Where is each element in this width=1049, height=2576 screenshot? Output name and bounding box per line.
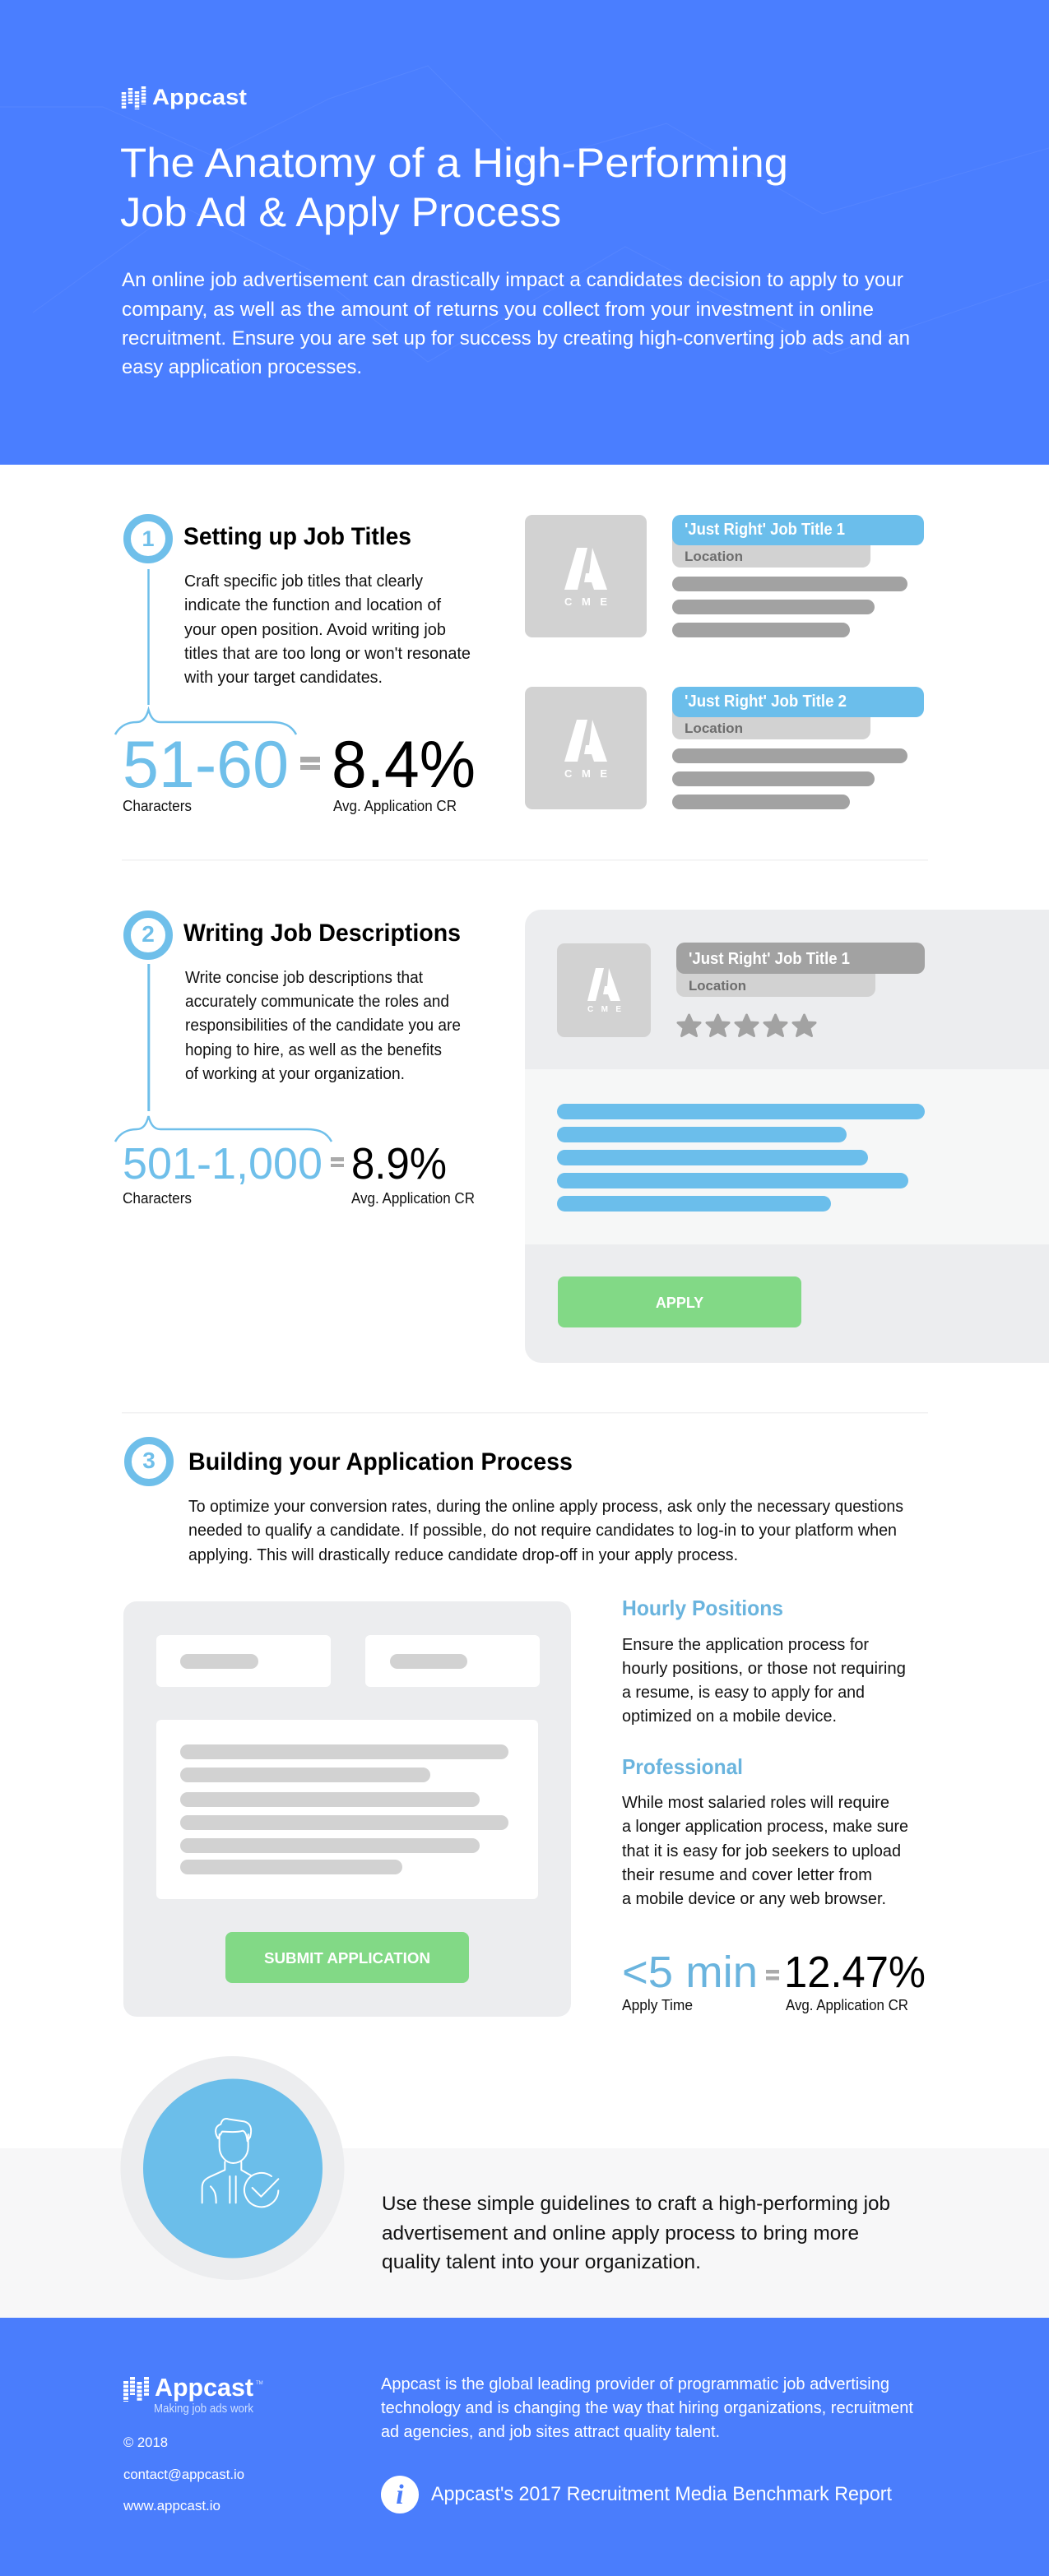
section 1 body text: with your target candidates.	[183, 668, 383, 687]
intro text: easy application processes.	[122, 356, 362, 378]
footer about text: technology and is changing the way that hiring organizations, recruitment	[381, 2399, 913, 2417]
section 2 body text: Write concise job descriptions that	[185, 968, 423, 987]
professional text: that it is easy for job seekers to upload	[622, 1842, 901, 1860]
footer logo: TM	[256, 2381, 263, 2386]
header banner	[0, 0, 1049, 465]
job card 1: C M E	[564, 595, 607, 608]
step 2 badge: 2	[142, 921, 155, 947]
stat: 501-1,000 characters = 8.9%: 501-1,000	[123, 1139, 323, 1188]
section 2 body text: accurately communicate the roles and	[185, 992, 449, 1011]
section 1: setting up job titles	[115, 515, 924, 814]
footer contact: www.appcast.io	[123, 2498, 220, 2513]
stat: 51-60 characters = 8.4%: 8.4%	[332, 728, 476, 802]
footer contact: contact@appcast.io	[123, 2467, 244, 2482]
footer about text: ad agencies, and job sites attract quality talent.	[381, 2423, 720, 2441]
stat: under 5 min apply time = 12.47%: Avg. Application CR	[786, 1997, 908, 2013]
icon: info: i	[396, 2480, 404, 2510]
hourly positions text: hourly positions, or those not requiring	[622, 1659, 906, 1678]
hourly positions text: Ensure the application process for	[622, 1635, 869, 1654]
closing text	[382, 2193, 890, 2273]
footer	[0, 2318, 1049, 2576]
stat: 501-1,000 characters = 8.9%	[123, 1139, 475, 1207]
closing text: Use these simple guidelines to craft a high-performing job	[382, 2193, 890, 2215]
stat: under 5 min apply time = 12.47%: <5 min	[622, 1948, 758, 1997]
section 1 body text: titles that are too long or won't resonate	[184, 644, 471, 663]
header logo: Appcast	[152, 85, 247, 109]
closing text: advertisement and online apply process to bring more	[382, 2222, 859, 2245]
hourly positions text	[622, 1596, 906, 1726]
stat: 501-1,000 characters = 8.9%: 8.9%	[351, 1139, 447, 1188]
intro text	[122, 269, 910, 378]
footer logo: Making job ads work	[154, 2402, 253, 2416]
section 1 body text: your open position. Avoid writing job	[184, 620, 446, 639]
hourly positions text: Hourly Positions	[622, 1596, 783, 1620]
description lines	[557, 1104, 925, 1212]
section 3 body text: To optimize your conversion rates, during the online apply process, ask only the necessary questions	[188, 1498, 903, 1516]
intro text: An online job advertisement can drastically impact a candidates decision to apply to your	[122, 269, 903, 291]
professional text: Professional	[622, 1754, 743, 1779]
section 1 body text: indicate the function and location of	[184, 595, 441, 614]
stat: 51-60 characters = 8.4%: Avg. Application CR	[333, 798, 457, 814]
footer logo	[126, 2373, 263, 2416]
step 1 badge	[127, 518, 169, 559]
professional text: their resume and cover letter from	[622, 1865, 872, 1884]
step 1 badge: 1	[142, 526, 155, 551]
closing band	[0, 2056, 1049, 2318]
footer logo: Appcast	[155, 2373, 253, 2402]
hourly positions text: optimized on a mobile device.	[622, 1707, 837, 1726]
section 2: writing job descriptions	[115, 910, 1049, 1363]
hourly positions text: a resume, is easy to apply for and	[622, 1683, 865, 1702]
title: The Anatomy of a High-Performing	[120, 140, 788, 186]
section 2 body text: responsibilities of the candidate you are	[185, 1016, 461, 1035]
submit button	[225, 1932, 469, 1983]
job card 2: C M E	[564, 767, 607, 780]
footer about text: Appcast is the global leading provider of programmatic job advertising	[381, 2375, 889, 2393]
stat: under 5 min apply time = 12.47%: Apply Time	[622, 1997, 693, 2013]
section 1 body text	[183, 572, 471, 687]
stat: 501-1,000 characters = 8.9%: Characters	[123, 1190, 192, 1207]
rating stars	[678, 1015, 815, 1036]
connector and brace	[147, 964, 150, 1111]
stat: 51-60 characters = 8.4%: 51-60	[123, 728, 289, 802]
closing text: quality talent into your organization.	[382, 2251, 701, 2273]
section 2 heading: Writing Job Descriptions	[183, 920, 461, 947]
section 1 heading: Setting up Job Titles	[183, 523, 411, 550]
job card 2	[525, 687, 924, 809]
section 3 body text	[188, 1498, 903, 1564]
stat: 51-60 characters = 8.4%	[123, 728, 476, 814]
intro text: company, as well as the amount of returns you collect from your investment in online	[122, 299, 874, 321]
job card 1	[525, 515, 924, 637]
professional text	[622, 1754, 908, 1908]
section 2 body text	[185, 968, 461, 1083]
icon: info	[381, 2476, 419, 2513]
title	[120, 140, 788, 235]
section 3 body text: needed to qualify a candidate. If possible, do not require candidates to log-in to your platform when	[188, 1522, 897, 1540]
apply button	[558, 1276, 801, 1327]
section 3: building your application process	[123, 1441, 926, 2017]
stat: 51-60 characters = 8.4%: Characters	[123, 798, 192, 814]
stat: under 5 min apply time = 12.47%: 12.47%	[784, 1948, 926, 1997]
professional text: While most salaried roles will require	[622, 1793, 889, 1812]
stat: 501-1,000 characters = 8.9%: Avg. Application CR	[351, 1190, 475, 1207]
section 2 body text: hoping to hire, as well as the benefits	[185, 1040, 442, 1059]
stat: under 5 min apply time = 12.47%	[622, 1948, 926, 2013]
section 2 body text: of working at your organization.	[185, 1064, 405, 1083]
section 3 body text: applying. This will drastically reduce candidate drop-off in your apply process.	[188, 1546, 738, 1564]
application form mockup	[123, 1601, 571, 2017]
intro text: recruitment. Ensure you are set up for success by creating high-converting job ads and an	[122, 327, 910, 350]
footer contact	[123, 2435, 244, 2513]
job ad detail card: 'Just Right' Job Title 1	[689, 950, 850, 968]
submit button: SUBMIT APPLICATION	[264, 1950, 430, 1967]
connector and brace	[115, 569, 296, 734]
section 1 body text: Craft specific job titles that clearly	[184, 572, 424, 591]
job card 1: Location	[685, 549, 743, 564]
job ad detail card	[525, 910, 1049, 1363]
title: Job Ad & Apply Process	[120, 189, 561, 235]
professional text: a mobile device or any web browser.	[622, 1889, 886, 1908]
footer contact: © 2018	[123, 2435, 168, 2450]
footer about text	[381, 2375, 913, 2441]
step 3 badge	[128, 1441, 169, 1482]
professional text: a longer application process, make sure	[622, 1817, 908, 1836]
step 2 badge	[127, 915, 169, 956]
job card 1: 'Just Right' Job Title 1	[685, 521, 845, 539]
job ad detail card: Location	[689, 978, 746, 994]
job card 2: Location	[685, 720, 743, 736]
icon: candidate with check	[120, 2056, 344, 2280]
step 3 badge: 3	[142, 1448, 155, 1473]
job card 2: 'Just Right' Job Title 2	[685, 693, 847, 711]
job ad detail card: C M E	[587, 1005, 621, 1014]
section 3 heading: Building your Application Process	[188, 1448, 573, 1476]
benchmark report link: Appcast's 2017 Recruitment Media Benchmark Report	[431, 2483, 892, 2505]
apply button: APPLY	[656, 1295, 703, 1311]
